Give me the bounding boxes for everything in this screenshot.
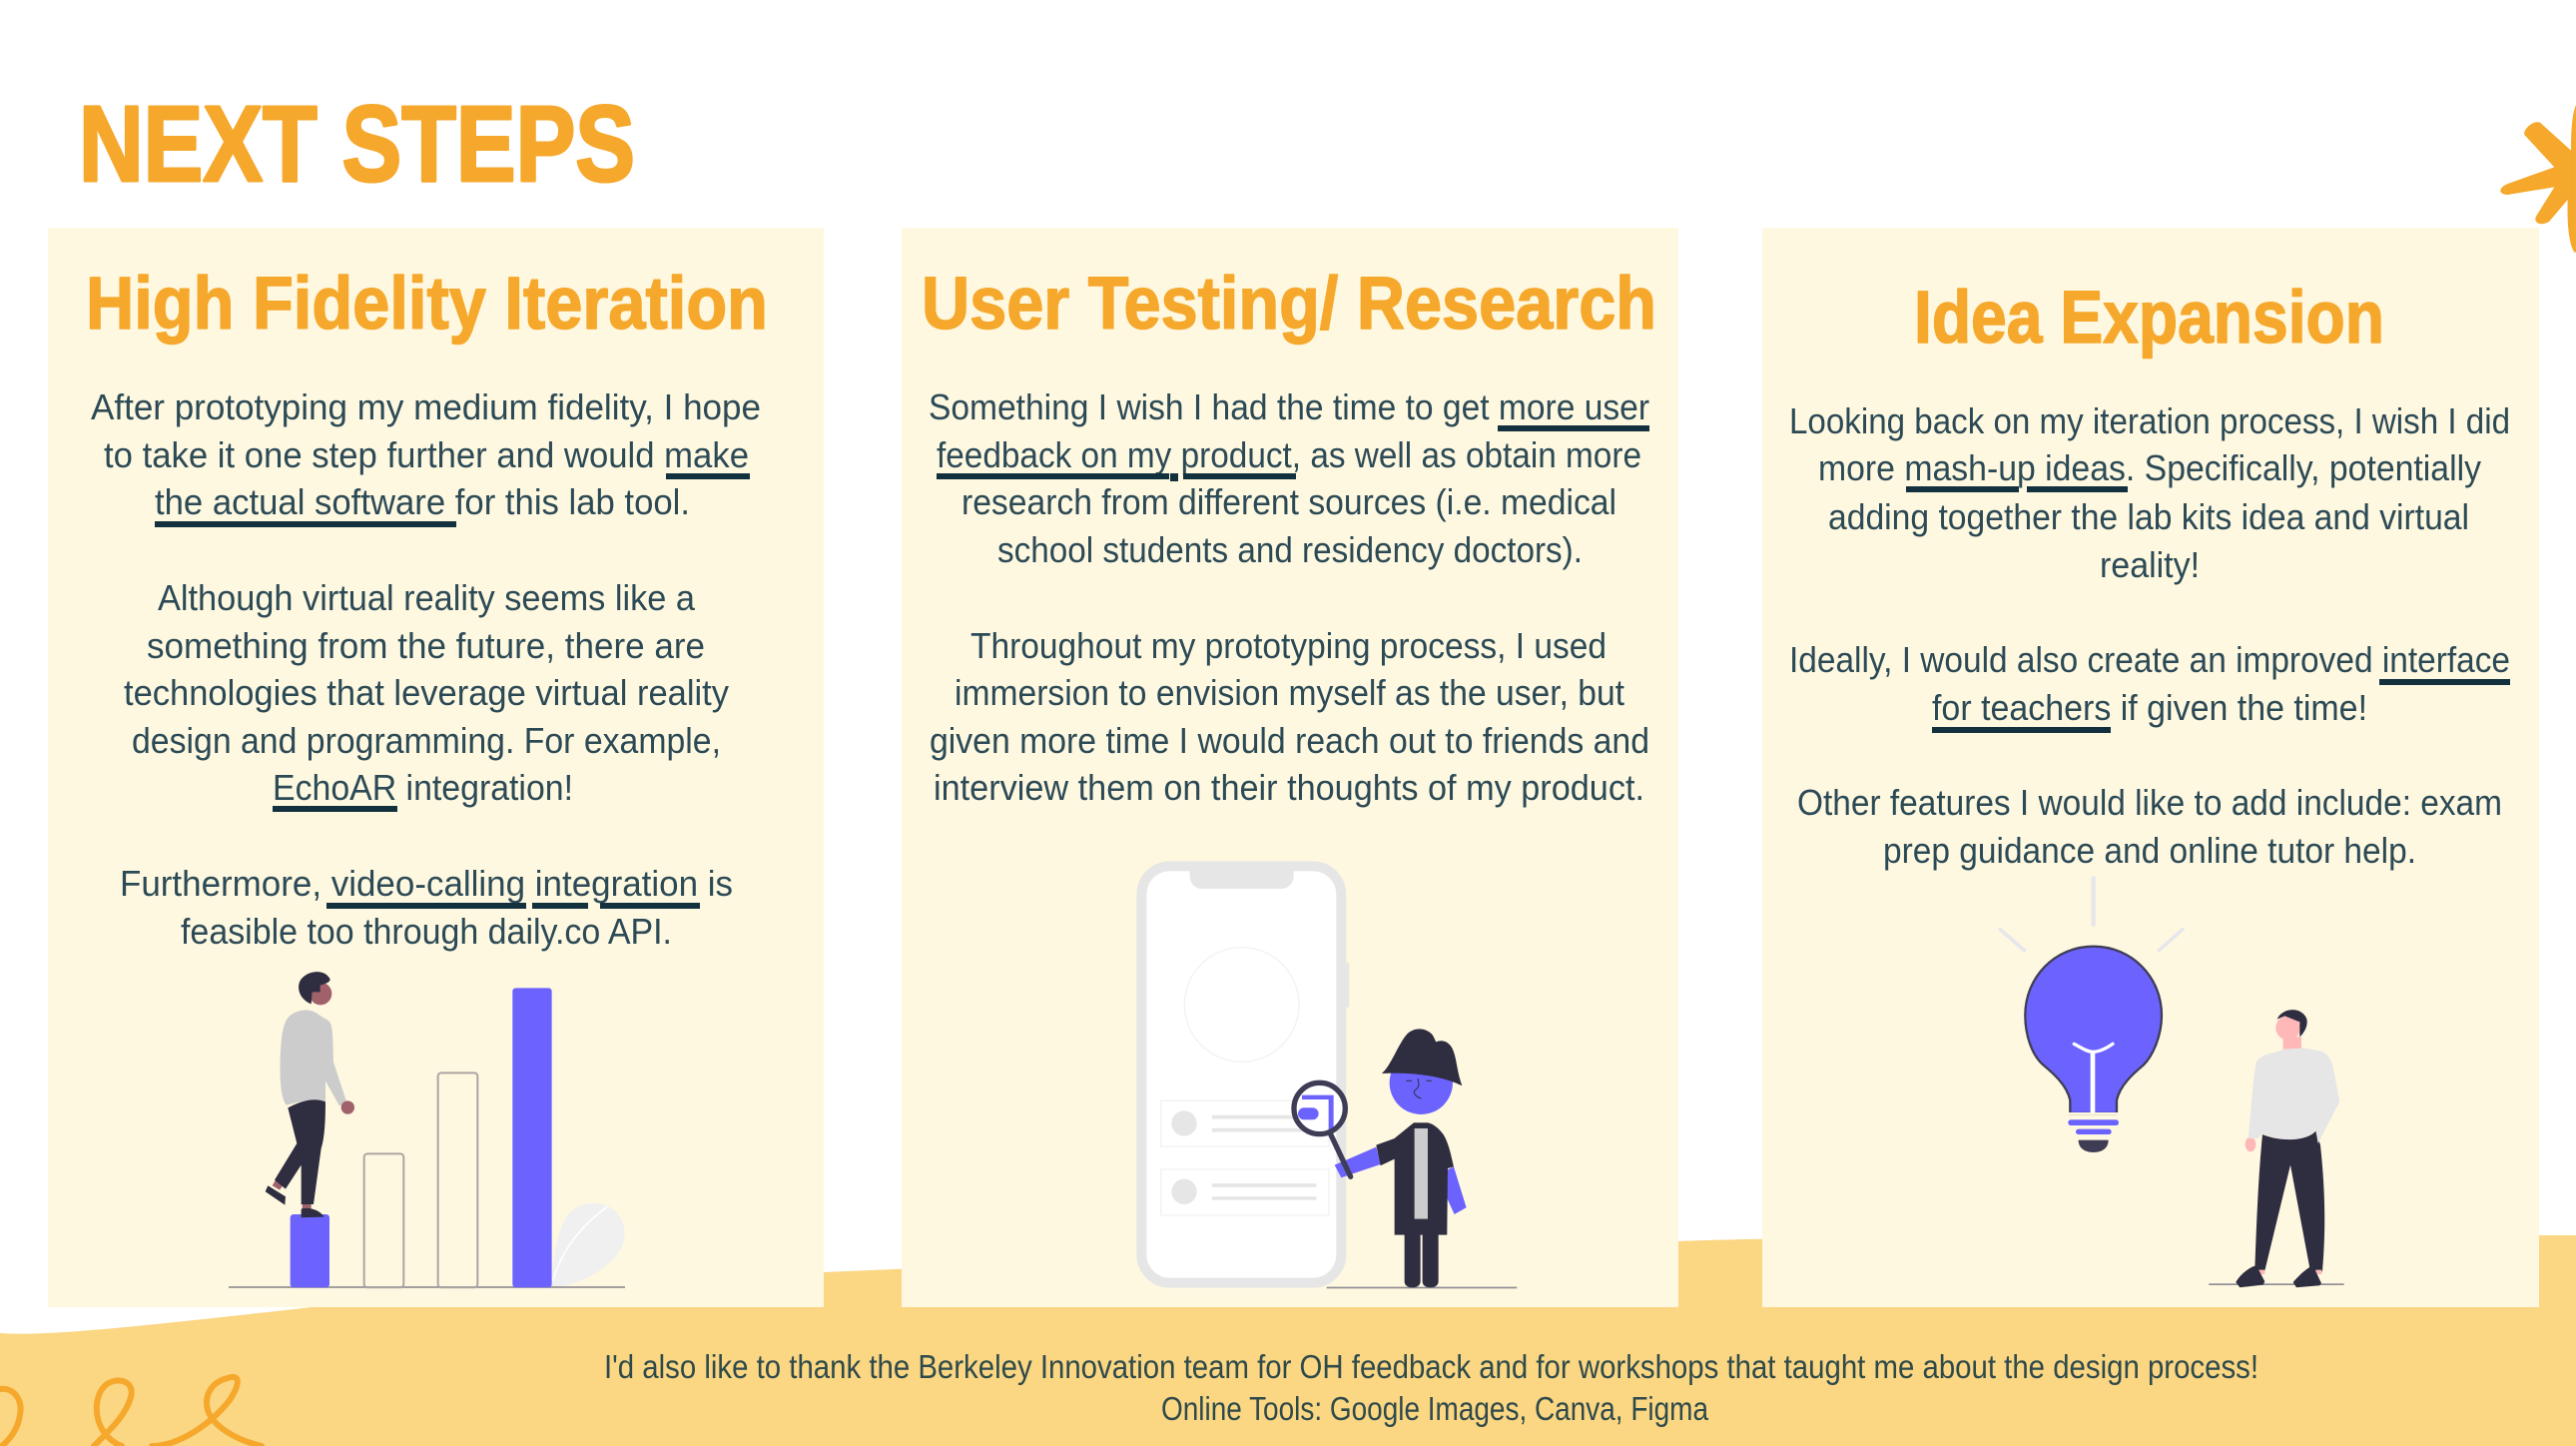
text block: mash-up ideas: more mash-up ideas. Specifically, potentially	[1818, 447, 2481, 488]
icon: magnifying glass	[1294, 1083, 1351, 1176]
text block: feedback	[929, 386, 1649, 570]
text block: mash-up ideas	[1789, 400, 2510, 585]
icon: phone	[1141, 866, 1349, 1283]
text block: teacher interface: for teachers if given the time!	[1932, 687, 2367, 728]
panel: high fidelity iteration	[48, 228, 824, 1307]
decorative star	[2500, 105, 2576, 253]
text block: virtual reality: something from the future, there are	[147, 625, 705, 666]
icon: leaf	[552, 1203, 625, 1287]
text block: feedback: research from different sources (i.e. medical	[962, 481, 1616, 522]
text block: feedback: feedback on my product, as well as obtain more	[937, 434, 1641, 475]
icon: light bulb	[2000, 878, 2183, 1152]
text block: video calling: Furthermore, video-calling integration is	[120, 863, 733, 904]
text block: virtual reality: design and programming. For example,	[132, 720, 721, 761]
text block: virtual reality: technologies that leverage virtual reality	[124, 672, 729, 713]
icon: ground line	[1327, 1287, 1517, 1288]
text block: virtual reality: EchoAR integration!	[273, 767, 573, 808]
text block: feedback: school students and residency doctors).	[997, 529, 1583, 570]
footer text	[604, 1348, 2258, 1427]
panel: user testing and research	[902, 228, 1678, 1307]
text block: other features	[1797, 782, 2502, 871]
footer band	[0, 1235, 2576, 1446]
illustration: light bulb and person	[2000, 878, 2344, 1287]
text block: immersion	[930, 625, 1649, 808]
title: NEXT STEPS	[79, 83, 635, 204]
text block: immersion: given more time I would reach out to friends and	[930, 720, 1649, 761]
text block: immersion: interview them on their thoughts of my product.	[934, 767, 1644, 808]
decorative scribble	[0, 1377, 262, 1446]
panel: idea expansion	[1762, 228, 2539, 1307]
text block: other features: Other features I would like to add include: exam	[1797, 782, 2502, 823]
text block: software: to take it one step further and would make	[104, 434, 749, 475]
icon: climbing person	[266, 972, 354, 1217]
heading: idea expansion: Idea Expansion	[1914, 276, 2384, 359]
text block: feedback: Something I wish I had the time to get more user	[929, 386, 1649, 427]
text block: teacher interface: Ideally, I would also create an improved interface	[1789, 639, 2510, 680]
text block: immersion: Throughout my prototyping process, I used	[970, 625, 1607, 666]
illustration: phone and detective	[1141, 866, 1517, 1288]
illustration: person climbing bars	[229, 972, 625, 1288]
text block: mash-up ideas: reality!	[2100, 544, 2200, 585]
icon: ground line	[2209, 1283, 2344, 1285]
footer text: Online Tools: Google Images, Canva, Figma	[1161, 1390, 1709, 1427]
text block: video calling: feasible too through daily.co API.	[181, 911, 672, 952]
heading: high fidelity iteration: High Fidelity Iteration	[86, 262, 768, 345]
text block: mash-up ideas: adding together the lab kits idea and virtual	[1828, 496, 2469, 537]
text block: virtual reality: Although virtual reality seems like a	[158, 577, 696, 618]
heading: user testing research: User Testing/ Research	[922, 262, 1656, 345]
text block: other features: prep guidance and online tutor help.	[1883, 830, 2416, 871]
footer text: I'd also like to thank the Berkeley Innovation team for OH feedback and for workshops that taught me about the design process!	[604, 1348, 2258, 1385]
text block: software	[91, 386, 761, 527]
icon: standing person	[2236, 1010, 2339, 1287]
icon: detective figure	[1335, 1029, 1467, 1287]
text block: mash-up ideas: Looking back on my iteration process, I wish I did	[1789, 400, 2510, 441]
text block: software: the actual software for this lab tool.	[155, 481, 690, 522]
text block: virtual reality	[124, 577, 729, 812]
text block: video calling	[120, 863, 733, 952]
text block: immersion: immersion to envision myself as the user, but	[955, 672, 1624, 713]
text block: software: After prototyping my medium fidelity, I hope	[91, 386, 761, 427]
icon: bars	[229, 988, 625, 1288]
text block: teacher interface	[1789, 639, 2510, 733]
